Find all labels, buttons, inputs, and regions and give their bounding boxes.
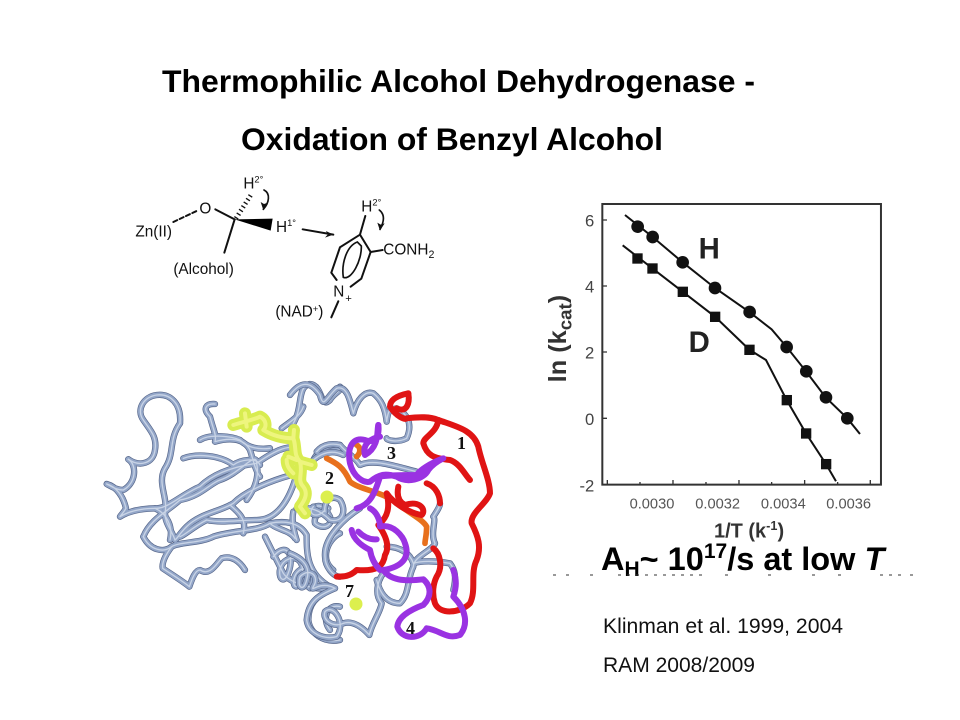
title: Thermophilic Alcohol Dehydrogenase - [162, 63, 755, 99]
ribbon: red segment [337, 393, 490, 611]
reaction scheme: alcohol hydride transfer to NAD+: + [345, 293, 352, 305]
y axis tick labels: -2 [580, 476, 594, 495]
ribbon: blue-grey domain [107, 384, 455, 641]
x axis tick labels: 0.0034 [761, 496, 806, 512]
pre-exponential factor annotation [553, 540, 913, 581]
reaction scheme: alcohol hydride transfer to NAD+: 2° [254, 175, 264, 185]
reaction scheme: alcohol hydride transfer to NAD+: (Alcohol) [173, 261, 234, 278]
series D [623, 245, 836, 481]
axis titles: -1 [766, 519, 777, 533]
reaction scheme: alcohol hydride transfer to NAD+: Zn(II) [135, 223, 172, 240]
series labels H and D: D [689, 326, 710, 359]
axis titles: ) [777, 520, 784, 542]
title: Oxidation of Benzyl Alcohol [241, 121, 663, 157]
axis titles: cat [554, 303, 575, 330]
series labels H and D: H [699, 232, 720, 265]
ribbon: purple segment [349, 425, 465, 637]
references: Klinman et al. 1999, 2004 [603, 615, 843, 638]
protein ribbon structure [107, 384, 490, 641]
reaction scheme: alcohol hydride transfer to NAD+: (NAD [275, 304, 313, 321]
labels: ribbon numbers: 7 [345, 581, 354, 601]
axis titles: ln (k [544, 330, 572, 382]
reaction scheme: alcohol hydride transfer to NAD+: 2 [428, 249, 434, 261]
reaction scheme: alcohol hydride transfer to NAD+: CONH [383, 242, 428, 259]
title [162, 63, 755, 157]
reaction scheme: alcohol hydride transfer to NAD+: 1° [287, 218, 296, 228]
ribbon: orange segment [327, 445, 427, 543]
reaction scheme: alcohol hydride transfer to NAD+ [135, 175, 434, 321]
pre-exponential factor annotation: ~ 10 [640, 541, 704, 577]
labels: ribbon numbers [325, 433, 466, 638]
reaction scheme: alcohol hydride transfer to NAD+: H [361, 198, 372, 215]
series H [625, 215, 860, 434]
pre-exponential factor annotation: 17 [704, 540, 727, 563]
axis titles: 1/T (k [714, 520, 766, 542]
references [603, 615, 843, 677]
y axis tick labels: 2 [585, 344, 594, 363]
x axis tick labels: 0.0030 [630, 496, 674, 512]
ligand: yellow-green cofactor [233, 413, 362, 610]
pre-exponential factor annotation: /s at low [727, 541, 864, 577]
labels: ribbon numbers: 2 [325, 468, 334, 488]
pre-exponential factor annotation: T [864, 541, 887, 577]
series labels H and D [689, 232, 720, 359]
pre-exponential factor annotation: A [601, 541, 624, 577]
labels: ribbon numbers: 3 [387, 443, 396, 463]
reaction scheme: alcohol hydride transfer to NAD+: ) [318, 304, 323, 321]
y axis tick labels: 0 [585, 410, 594, 429]
reaction scheme: alcohol hydride transfer to NAD+: H [276, 219, 287, 236]
reaction scheme: alcohol hydride transfer to NAD+: O [199, 201, 211, 218]
y axis tick labels [580, 212, 594, 495]
y axis tick labels: 4 [585, 278, 594, 297]
reaction scheme: alcohol hydride transfer to NAD+: N [333, 284, 344, 301]
x axis tick labels: 0.0036 [826, 496, 871, 512]
x axis tick labels: 0.0032 [695, 496, 740, 512]
reaction scheme: alcohol hydride transfer to NAD+: + [313, 304, 318, 314]
reaction scheme: alcohol hydride transfer to NAD+: 2° [372, 197, 382, 207]
x axis tick labels [630, 496, 871, 512]
labels: ribbon numbers: 1 [457, 433, 466, 453]
labels: ribbon numbers: 4 [406, 618, 415, 638]
y axis tick labels: 6 [585, 212, 594, 231]
pre-exponential factor annotation: H [624, 558, 640, 581]
axis titles: ) [544, 295, 572, 303]
chart frame and ticks [602, 204, 881, 485]
references: RAM 2008/2009 [603, 654, 755, 677]
reaction scheme: alcohol hydride transfer to NAD+: H [243, 176, 254, 193]
axis titles [544, 295, 784, 542]
chart: Arrhenius plot ln(kcat) vs 1/T [544, 204, 881, 542]
